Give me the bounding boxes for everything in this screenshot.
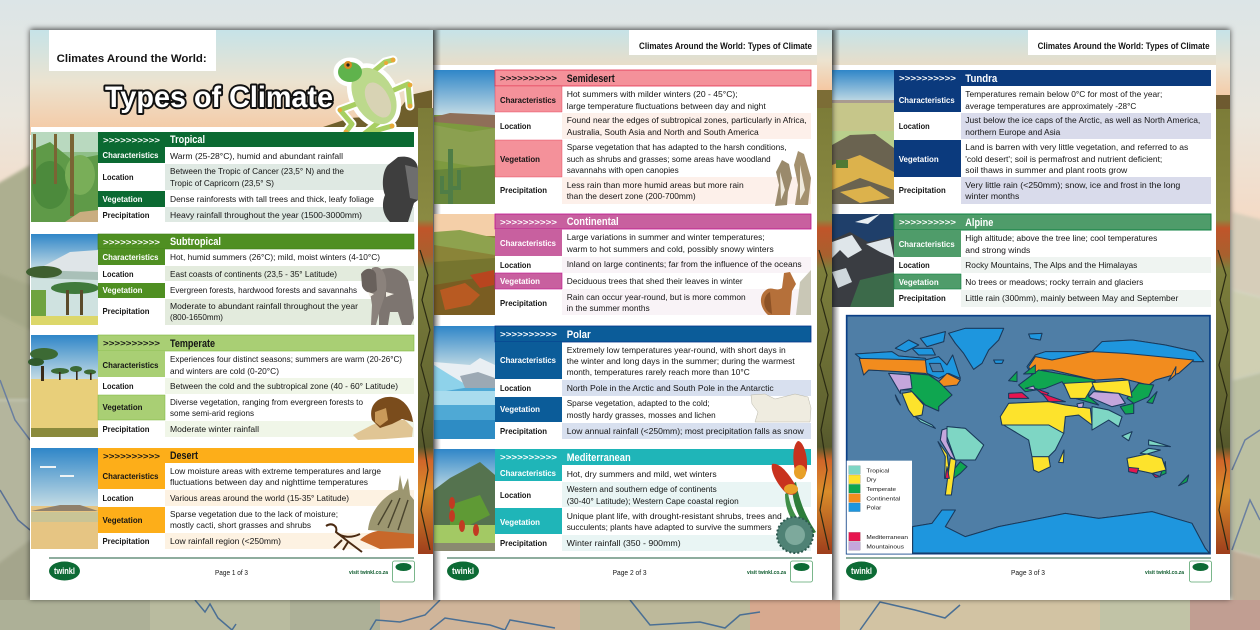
section: Continental: warm to hot summers and cold, possibly snowy winters — [566, 244, 774, 254]
map legend — [847, 461, 912, 554]
icon: polar bear — [751, 394, 811, 422]
section: Polar: month, temperatures rarely reach more than 10°C — [567, 367, 750, 377]
image: autumn continental hills — [434, 214, 495, 315]
page 2 footer: twinkl — [452, 566, 474, 576]
section: Continental: Inland on large continents; far from the influence of the oceans — [567, 259, 802, 269]
heading: Alpine: Alpine — [965, 217, 993, 229]
page 2 footer: Page 2 of 3 — [613, 568, 647, 577]
panel: page 2 sheet — [433, 30, 832, 600]
section: Desert: Low rainfall region (<250mm) — [170, 536, 281, 546]
section: Tropical: Between the Tropic of Cancer (23,5° N) and the — [170, 166, 344, 176]
section: Tropical: Location — [102, 173, 134, 182]
section: Continental — [434, 214, 811, 315]
section: Polar: North Pole in the Arctic and South Pole in the Antarctic — [567, 383, 774, 393]
section: Tundra: Land is barren with very little vegetation, and referred to as — [965, 142, 1188, 152]
section: Continental: Rain can occur year-round, but is more common — [567, 292, 746, 302]
page 2 footer — [447, 558, 812, 582]
section: Tundra: Temperatures remain below 0°C for most of the year; — [965, 89, 1162, 99]
section: Temperate: some semi-arid regions — [170, 408, 254, 418]
image: semidesert with cactus — [434, 70, 495, 204]
section: Polar: the winter and long days in the summer; during the warmest — [567, 356, 795, 366]
section: Subtropical: Characteristics — [102, 253, 159, 262]
section: Mediterranean: Precipitation — [500, 539, 547, 548]
section: Desert: Sparse vegetation due to the lack of moisture; — [170, 509, 338, 519]
section: Desert: mostly cacti, short grasses and shrubs — [170, 520, 311, 530]
section: Tropical: Tropic of Capricorn (23,5° S) — [170, 178, 274, 188]
section: Tundra: Very little rain (<250mm); snow, ice and frost in the long — [965, 180, 1181, 190]
section: Mediterranean: (30-40° Latitude); Western Cape coastal region — [567, 496, 739, 506]
map legend: Mountainous — [866, 544, 904, 550]
section: Semidesert: savannahs with open canopies — [567, 165, 679, 175]
page 3 running title — [1028, 30, 1216, 55]
section: Tropical: Vegetation — [102, 195, 142, 204]
section: Temperate: Location — [102, 382, 134, 391]
section: Subtropical: (800-1650mm) — [170, 312, 223, 322]
page 3 footer: visit twinkl.co.za — [1145, 570, 1184, 576]
heading: Polar: Polar — [567, 329, 591, 341]
heading: Temperate: Temperate — [170, 338, 215, 350]
map legend: Continental — [866, 496, 900, 502]
section: Tropical: Warm (25-28°C), humid and abundant rainfall — [170, 151, 343, 161]
section: Subtropical — [26, 234, 414, 325]
section: Alpine: Vegetation — [899, 278, 939, 287]
main title: Types of Climate — [105, 81, 333, 114]
section: Temperate: Precipitation — [102, 425, 150, 434]
icon: lion — [353, 397, 413, 440]
section: Subtropical: Evergreen forests, hardwood forests and savannahs — [170, 285, 357, 295]
heading: Mediterranean: Mediterranean — [567, 452, 631, 464]
section: Desert: Characteristics — [102, 472, 159, 481]
icon: desert shrub and scorpion — [326, 475, 414, 552]
section: Tundra: Characteristics — [899, 96, 955, 105]
image: tundra landscape — [832, 70, 894, 204]
section: Tundra: Just below the ice caps of the Arctic, as well as North America, — [965, 115, 1200, 125]
section: Mediterranean: Location — [500, 491, 531, 500]
section: Tundra: soil thaws in summer and plant roots grow — [965, 165, 1128, 175]
section: Mediterranean: Vegetation — [500, 518, 540, 527]
section: Polar: Location — [500, 384, 531, 393]
section: Semidesert: Precipitation — [500, 186, 547, 195]
icon: squirrel on tree — [761, 270, 811, 315]
section: Desert: Precipitation — [102, 537, 150, 546]
section: Temperate: Moderate winter rainfall — [170, 424, 259, 434]
section: Semidesert — [434, 70, 811, 206]
section: Tundra: Location — [899, 122, 930, 131]
section: Tundra: winter months — [964, 191, 1019, 201]
section: Continental: Large variations in summer and winter temperatures; — [567, 232, 765, 242]
section: Mediterranean — [434, 441, 816, 553]
page 1 footer: twinkl — [54, 566, 75, 576]
section: Polar: Characteristics — [500, 356, 556, 365]
heading: Desert: Desert — [170, 450, 198, 462]
section: Polar: Sparse vegetation, adapted to the cold; — [567, 398, 710, 408]
section: Continental: Precipitation — [500, 299, 547, 308]
section: Continental: in the summer months — [567, 303, 650, 313]
section: Tropical: Dense rainforests with tall trees and thick, leafy foliage — [170, 194, 374, 204]
section: Alpine: >>>>>>>>>> — [899, 217, 956, 227]
section: Temperate: Between the cold and the subtropical zone (40 - 60° Latitude) — [170, 381, 398, 391]
heading: Tundra: Tundra — [965, 73, 998, 85]
section: Continental: Location — [500, 261, 531, 270]
section: Alpine: No trees or meadows; rocky terrain and glaciers — [965, 277, 1143, 287]
icon: meerkats — [775, 151, 811, 206]
section: Temperate: Characteristics — [102, 361, 159, 370]
map legend: Polar — [866, 506, 882, 512]
section: Semidesert: Vegetation — [500, 155, 540, 164]
heading: Subtropical: Subtropical — [170, 236, 221, 248]
page 1 footer — [49, 558, 414, 582]
title tab — [49, 30, 216, 71]
section: Polar: >>>>>>>>>> — [500, 329, 557, 339]
section: Temperate: Experiences four distinct seasons; summers are warm (20-26°C) — [170, 354, 402, 364]
page 3 footer: twinkl — [851, 566, 872, 576]
world climate map — [847, 316, 1210, 554]
section: Subtropical: East coasts of continents (23,5 - 35° Latitude) — [170, 269, 337, 279]
map legend: Mediterranean — [866, 535, 908, 541]
section: Desert — [31, 448, 414, 552]
section: Alpine — [832, 214, 1211, 307]
section: Tropical: Precipitation — [102, 211, 150, 220]
section: Tropical: Characteristics — [102, 151, 159, 160]
section: Semidesert: Sparse vegetation that has adapted to the harsh conditions, — [567, 142, 787, 152]
section: Semidesert: Location — [500, 122, 531, 131]
section: Mediterranean: Unique plant life, with drought-resistant shrubs, trees and — [567, 511, 782, 521]
section: Tropical: >>>>>>>>>> — [103, 135, 160, 145]
section: Semidesert: Found near the edges of subtropical zones, particularly in Africa, — [567, 115, 807, 125]
image: rainforest — [31, 132, 98, 222]
heading: Tropical: Tropical — [170, 134, 205, 146]
icon: red hot poker flowers and succulent — [772, 441, 816, 553]
page 2 running title: Climates Around the World: Types of Climate — [639, 41, 812, 51]
section: Desert: >>>>>>>>>> — [103, 451, 160, 461]
section: Desert: Various areas around the world (15-35° Latitude) — [170, 493, 349, 503]
section: Semidesert: such as shrubs and grasses; some areas have woodland — [567, 154, 771, 164]
icon: tree frog — [338, 58, 412, 136]
section: Polar: Low annual rainfall (<250mm); most precipitation falls as snow — [567, 426, 804, 436]
section: Alpine: and strong winds — [965, 245, 1030, 255]
section: Mediterranean: Hot, dry summers and mild, wet winters — [567, 469, 717, 479]
section: Alpine: Characteristics — [899, 240, 955, 249]
page 2 running title — [629, 30, 817, 55]
section: Alpine: Precipitation — [899, 294, 946, 303]
section: Desert: Vegetation — [102, 516, 142, 525]
section: Tundra: Precipitation — [899, 186, 946, 195]
section: Tundra: average temperatures are approximately -28°C — [965, 101, 1136, 111]
section: Continental: Deciduous trees that shed their leaves in winter — [567, 276, 743, 286]
section: Alpine: High altitude; above the tree line; cool temperatures — [965, 233, 1157, 243]
section: Temperate — [28, 335, 414, 440]
section: Desert: fluctuations between day and nighttime temperatures — [170, 477, 368, 487]
section: Tropical: Heavy rainfall throughout the year (1500-3000mm) — [170, 210, 362, 220]
page 1 footer: Page 1 of 3 — [215, 568, 248, 577]
page 3 footer: Page 3 of 3 — [1011, 568, 1045, 577]
image: desert dunes — [31, 448, 98, 549]
section: Mediterranean: Characteristics — [500, 469, 556, 478]
section: Semidesert: >>>>>>>>>> — [500, 73, 557, 83]
image: acacia and snowy mountain — [26, 234, 99, 325]
section: Polar: mostly hardy grasses, mosses and lichen — [567, 410, 716, 420]
icon: gorilla — [383, 157, 418, 222]
map legend: Temperate — [866, 487, 896, 493]
section: Continental: Vegetation — [500, 277, 540, 286]
heading: Continental: Continental — [567, 216, 619, 228]
image: savanna trees — [28, 335, 98, 437]
section: Subtropical: Precipitation — [102, 307, 150, 316]
section: Polar: Precipitation — [500, 427, 547, 436]
image: alpine mountains — [832, 214, 894, 307]
page 3 footer — [846, 558, 1212, 582]
section: Continental: >>>>>>>>>> — [500, 217, 557, 227]
section: Semidesert: large temperature fluctuations between day and night — [567, 101, 766, 111]
title tab: Climates Around the World: — [57, 53, 207, 65]
section: Semidesert: Less rain than more humid areas but more rain — [567, 180, 744, 190]
page 1 footer: visit twinkl.co.za — [349, 570, 388, 576]
heading: Semidesert: Semidesert — [567, 73, 615, 85]
section: Temperate: and winters are cold (0-20°C) — [170, 366, 279, 376]
page 3 running title: Climates Around the World: Types of Climate — [1038, 41, 1210, 51]
section: Polar: Vegetation — [500, 405, 540, 414]
section: Temperate: Diverse vegetation, ranging from evergreen forests to — [170, 397, 363, 407]
panel: page 1 sheet — [26, 30, 433, 600]
section: Polar: Extremely low temperatures year-round, with short days in — [567, 345, 786, 355]
section: Temperate: >>>>>>>>>> — [103, 338, 160, 348]
section: Tundra: northern Europe and Asia — [965, 127, 1061, 137]
page 2 footer: visit twinkl.co.za — [747, 570, 786, 576]
section: Desert: Location — [102, 494, 134, 503]
section: Tundra: Vegetation — [899, 155, 939, 164]
section: Alpine: Rocky Mountains, The Alps and the Himalayas — [965, 260, 1137, 270]
section: Tundra: 'cold desert'; soil is permafrost and nutrient deficient; — [965, 154, 1162, 164]
section: Subtropical: Hot, humid summers (26°C); mild, moist winters (4-10°C) — [170, 252, 380, 262]
section: Semidesert: Australia, South Asia and North and South America — [567, 127, 759, 137]
section: Tropical — [31, 132, 418, 222]
section: Alpine: Little rain (300mm), mainly between May and September — [965, 293, 1178, 303]
section: Tundra — [832, 70, 1211, 204]
section: Subtropical: Location — [102, 270, 134, 279]
map legend: Dry — [866, 478, 877, 484]
section: Subtropical: >>>>>>>>>> — [103, 237, 160, 247]
section: Temperate: Vegetation — [102, 403, 142, 412]
section: Mediterranean: Winter rainfall (350 - 900mm) — [567, 538, 681, 548]
section: Subtropical: Moderate to abundant rainfall throughout the year — [170, 301, 358, 311]
section: Semidesert: Characteristics — [500, 96, 556, 105]
section: Mediterranean: Western and southern edge of continents — [567, 484, 717, 494]
section: Subtropical: Vegetation — [102, 286, 142, 295]
image: fynbos landscape — [434, 449, 495, 551]
map legend: Tropical — [866, 468, 889, 474]
section: Semidesert: than the desert zone (200-700mm) — [567, 191, 696, 201]
section: Desert: Low moisture areas with extreme temperatures and large — [170, 466, 381, 476]
section: Polar — [434, 326, 811, 439]
section: Mediterranean: succulents; plants have adapted to survive the summers — [567, 522, 772, 532]
icon: elephant — [361, 267, 414, 325]
section: Semidesert: Hot summers with milder winters (20 - 45°C); — [567, 89, 738, 99]
panel: page 3 sheet — [832, 30, 1230, 600]
section: Continental: Characteristics — [500, 239, 556, 248]
section: Mediterranean: >>>>>>>>>> — [500, 452, 557, 462]
image: polar iceberg — [434, 326, 495, 439]
section: Alpine: Location — [899, 261, 930, 270]
section: Tundra: >>>>>>>>>> — [899, 73, 956, 83]
